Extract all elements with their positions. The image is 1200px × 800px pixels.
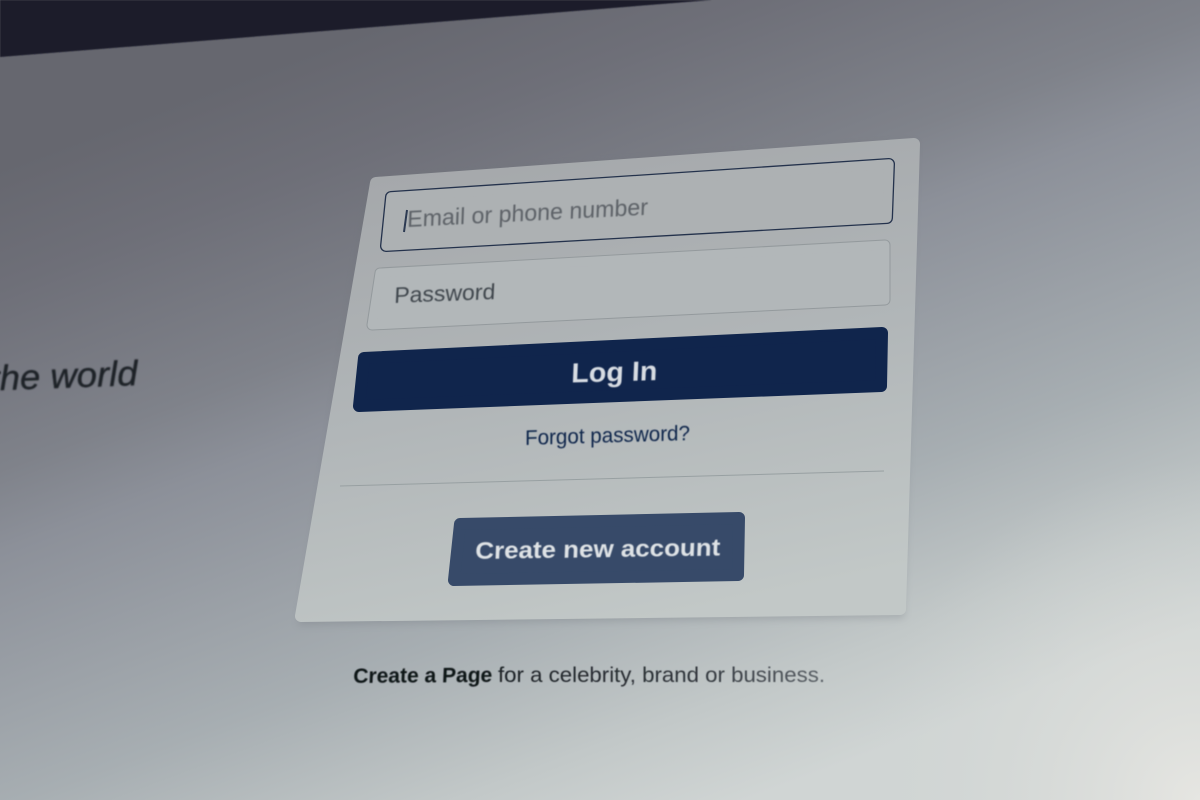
panel: login card [298, 141, 916, 625]
card surface [301, 144, 914, 616]
log in label: Log In [571, 355, 658, 389]
text caret [404, 210, 407, 232]
email input [386, 164, 889, 246]
create new account label: Create new account [475, 535, 721, 565]
create a page footer line [353, 664, 825, 688]
password input [372, 245, 885, 325]
dark screen bezel at top [0, 0, 712, 57]
create new account button [454, 518, 739, 580]
create a page footer line: Create a Page [353, 664, 493, 688]
forgot password link: Forgot password? [525, 422, 690, 450]
card shadow [298, 141, 916, 625]
email placeholder: Email or phone number [407, 194, 649, 232]
create a page footer line: for a celebrity, brand or business. [498, 664, 825, 687]
divider [340, 471, 884, 486]
log in button [359, 333, 882, 406]
password placeholder: Password [394, 279, 496, 308]
